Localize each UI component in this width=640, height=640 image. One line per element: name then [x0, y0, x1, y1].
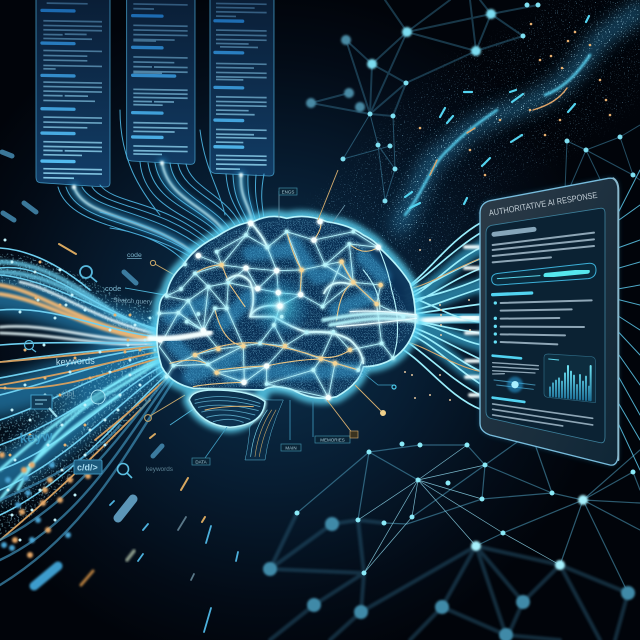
centre glow — [248, 275, 312, 338]
mesh: cyan — [159, 223, 403, 398]
document column: middle — [127, 0, 195, 164]
brain — [150, 216, 417, 460]
icon: angle tag: (dp) — [62, 391, 74, 398]
icon: lens ring — [91, 390, 105, 404]
blue bokeh — [4, 465, 68, 548]
mesh: gold — [170, 222, 378, 387]
bullet lines — [501, 300, 592, 344]
blue haze — [170, 243, 383, 377]
stem fibres cyan — [251, 410, 267, 457]
gold fan lines — [400, 258, 482, 372]
particle dots — [5, 240, 155, 540]
upper cyan band — [0, 262, 170, 335]
bullets — [490, 303, 500, 342]
icon: blue leader right — [362, 372, 395, 385]
chart card — [544, 354, 595, 403]
panel glow — [480, 178, 618, 465]
inner page — [486, 208, 605, 443]
dense dust — [400, 10, 640, 225]
tag: main: MAIN — [285, 446, 297, 450]
beam strands — [337, 311, 417, 327]
data streams: left side — [0, 240, 175, 585]
side glow — [606, 230, 614, 410]
far nodes — [372, 14, 491, 64]
tag: data: DATA — [195, 460, 207, 464]
icon: magnifier 3 — [118, 464, 132, 478]
text: keywords: keywords — [56, 356, 95, 367]
connectors blue — [125, 288, 195, 425]
glow orb — [494, 377, 535, 393]
beam through brain — [323, 313, 417, 325]
small nodes — [297, 444, 633, 573]
document column: left — [36, 0, 110, 187]
sulci — [227, 222, 363, 363]
small nodes — [343, 5, 633, 201]
labels: leader lines and tags — [192, 170, 396, 465]
cyan strands — [0, 248, 172, 515]
panel heading: AUTHORITATIVE AI RESPONSE — [488, 190, 598, 218]
tag: top leader — [279, 170, 345, 222]
floating icons and keywords — [2, 152, 238, 632]
beam glow — [300, 316, 490, 321]
left entry beam — [150, 333, 210, 339]
brain glow — [157, 216, 415, 427]
highlight pill — [492, 263, 596, 285]
document column: right — [210, 0, 274, 176]
convergence glow — [95, 328, 175, 342]
bokeh — [2, 455, 88, 555]
icon: small bars — [2, 152, 162, 456]
tag: code box: c/d/> — [77, 462, 98, 472]
panel edge — [613, 178, 618, 460]
cable sparks — [74, 163, 241, 187]
orange dots — [420, 24, 610, 175]
nodes: white — [160, 222, 378, 398]
text: keywords small: keywords — [146, 466, 173, 473]
stippled texture — [159, 219, 415, 397]
bright links — [358, 445, 560, 573]
section lines — [493, 363, 538, 374]
section head — [493, 293, 532, 295]
connector dots left — [145, 260, 185, 421]
fan lines — [395, 222, 482, 410]
summary lines — [493, 233, 594, 262]
bright cyan sweep — [0, 355, 165, 500]
tag: top leader: ENGS — [282, 190, 294, 194]
cables: columns into brain — [58, 110, 264, 265]
blurred links — [270, 513, 628, 640]
dim nodes — [311, 40, 360, 107]
stream dust — [0, 268, 170, 520]
brain body — [157, 216, 415, 398]
thin cables — [58, 110, 264, 265]
bright filaments — [405, 55, 590, 215]
cerebellum — [189, 390, 265, 427]
closing lines — [493, 404, 593, 426]
cable glow — [74, 163, 253, 258]
tag: data — [192, 427, 227, 465]
lines right of panel — [612, 170, 640, 470]
network: lower right — [270, 430, 640, 640]
icon: gold nodes — [327, 385, 386, 438]
text: keywords large: keyw — [19, 428, 54, 446]
medium links — [297, 430, 640, 593]
wide scatter — [350, 10, 640, 260]
icon: teal ring — [392, 385, 396, 389]
text: search query: Search query — [113, 297, 153, 306]
spark — [584, 52, 590, 58]
core beam — [290, 318, 490, 324]
fan glow — [410, 247, 482, 380]
shards — [405, 16, 589, 208]
icon: magnifier 2 — [24, 340, 36, 352]
tag: code box — [74, 460, 102, 474]
brain stem — [245, 400, 283, 460]
far links — [311, 0, 538, 116]
bright ends — [462, 247, 484, 395]
tag: memories: MEMORIES — [320, 438, 345, 442]
particle wave: upper right — [350, 10, 640, 260]
tag: main — [281, 400, 301, 451]
dark blue lower strands — [0, 372, 174, 585]
cerebellum gold — [205, 406, 253, 410]
bright cables — [74, 163, 253, 258]
fan particles — [405, 240, 470, 400]
nodes: gold — [195, 262, 381, 373]
text: code 2: code — [105, 284, 121, 293]
stream glow — [0, 295, 175, 480]
wave haze — [400, 10, 640, 225]
bright nodes — [476, 500, 583, 565]
nodes: cyan — [159, 232, 403, 384]
icon: document card — [31, 395, 57, 417]
text: code: code — [127, 252, 142, 259]
light beams: brain to response — [290, 170, 640, 470]
gold dots — [5, 262, 140, 455]
tag: memories — [313, 400, 350, 443]
network: upper right — [311, 0, 640, 210]
title bar — [494, 229, 534, 234]
blurred nodes — [270, 524, 628, 635]
orange filaments — [430, 88, 567, 175]
section head 3 — [493, 398, 524, 402]
right-side arcs — [363, 247, 398, 358]
icon: magnifier 1 — [80, 266, 97, 282]
bright white strands — [0, 282, 175, 344]
icon: large blurred bars — [34, 499, 238, 632]
gold strands — [0, 285, 170, 342]
icon: gold dashes — [59, 244, 205, 522]
stem fibres — [255, 410, 276, 457]
near links — [343, 114, 640, 210]
gold lower strands — [0, 345, 175, 540]
section head 2 — [493, 356, 521, 358]
cerebellum folds — [195, 397, 260, 422]
panel frame — [480, 178, 618, 465]
response panel — [480, 178, 618, 465]
